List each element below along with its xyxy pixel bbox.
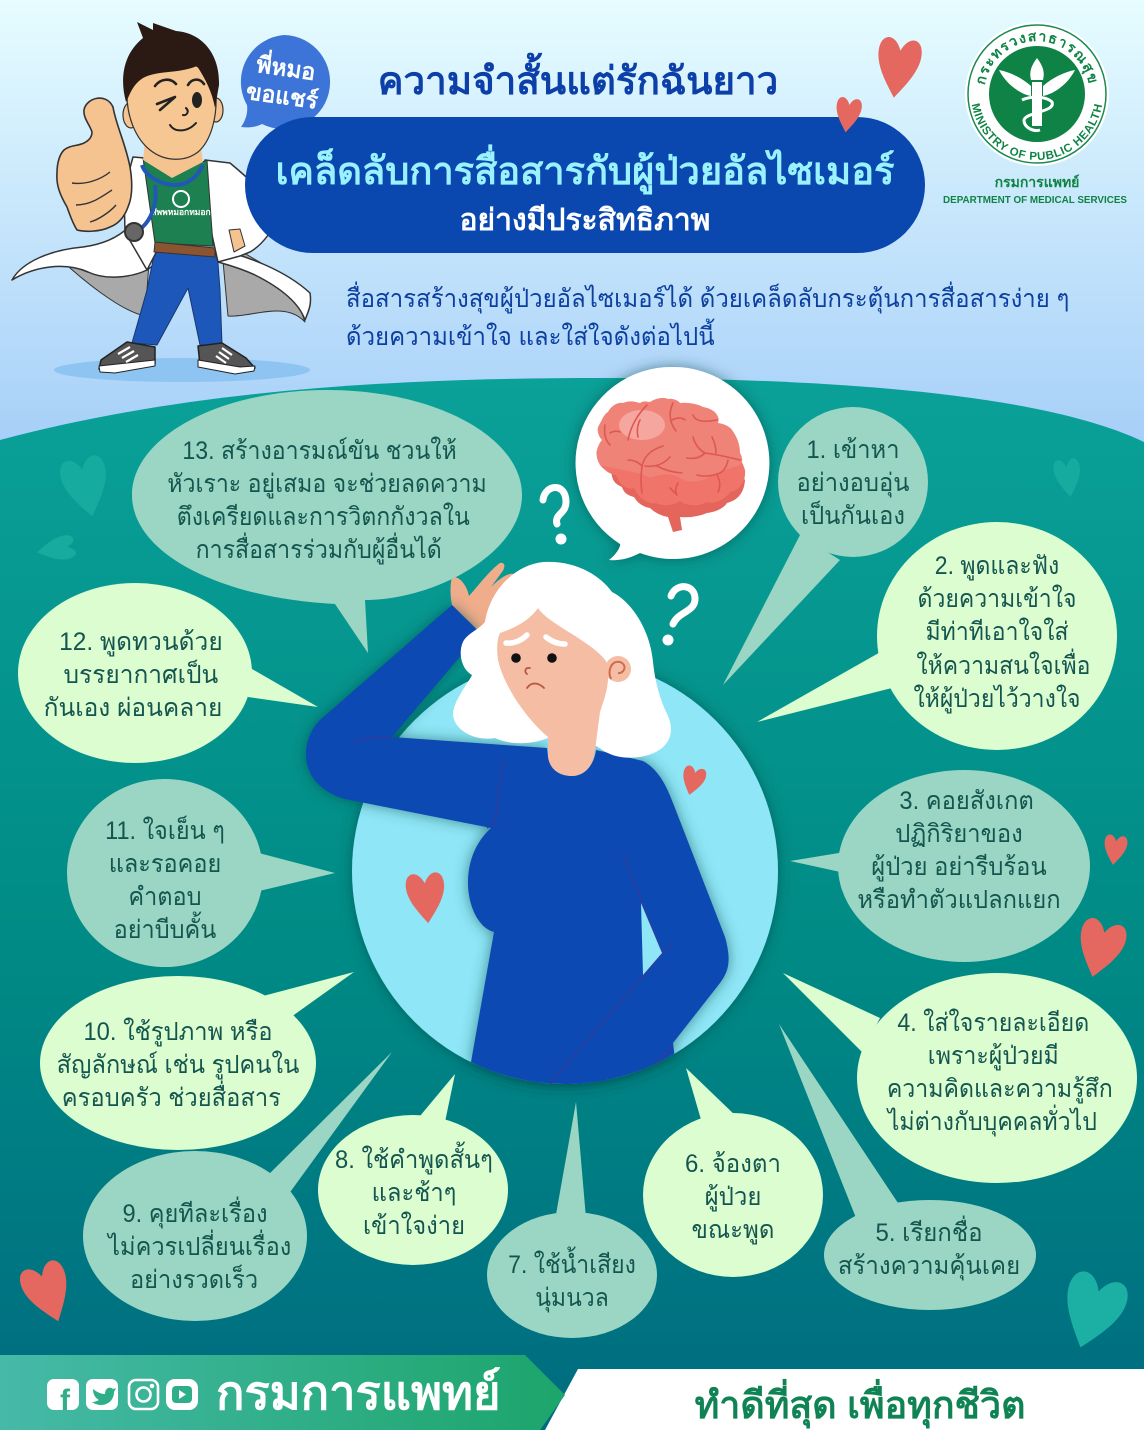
sub title: อย่างมีประสิทธิภาพ — [460, 204, 710, 237]
text: 9. คุยทีละเรื่อง — [122, 1196, 268, 1229]
shirt logo — [173, 191, 189, 207]
text: ให้ผู้ป่วยไว้วางใจ — [913, 684, 1081, 714]
text: อย่าบีบคั้น — [114, 911, 216, 944]
text: 13. สร้างอารมณ์ขัน ชวนให้ — [182, 436, 457, 465]
text: 4. ใส่ใจรายละเอียด — [897, 1008, 1089, 1037]
ground shadow — [54, 358, 310, 382]
bubble 3 — [790, 770, 1090, 962]
logo caption english: DEPARTMENT OF MEDICAL SERVICES — [943, 194, 1127, 206]
text: ปฏิกิริยาของ — [895, 820, 1023, 848]
stethoscope head — [125, 223, 143, 241]
ears — [123, 98, 223, 128]
heart: teal upper left — [58, 453, 115, 521]
footer white band — [545, 1369, 1144, 1430]
intro text: สื่อสารสร้างสุขผู้ป่วยอัลไซเมอร์ได้ ด้วยเคล็ดลับกระตุ้นการสื่อสารง่าย ๆ — [346, 280, 1069, 314]
text: ด้วยความเข้าใจ — [918, 584, 1076, 613]
text: กันเอง ผ่อนคลาย — [44, 695, 222, 722]
tail and bubble shape — [783, 973, 880, 1052]
hand on hip — [229, 229, 245, 252]
text: ไม่ควรเปลี่ยนเรื่อง — [106, 1229, 291, 1261]
logo caption thai: กรมการแพทย์ — [995, 174, 1079, 190]
text: ผู้ป่วย อย่ารีบร้อน — [871, 853, 1047, 882]
icon: twitter — [86, 1379, 118, 1410]
tail and bubble shape — [555, 1102, 586, 1220]
bubble 8 — [318, 1074, 508, 1265]
bubble 7 — [487, 1102, 657, 1338]
text: อย่างรวดเร็ว — [130, 1263, 258, 1294]
text: สร้างความคุ้นเคย — [838, 1253, 1020, 1281]
coat torso — [124, 157, 280, 270]
woman: ear — [605, 656, 631, 682]
text: ให้ความสนใจเพื่อ — [916, 648, 1090, 680]
open eye — [192, 92, 202, 108]
text: บรรยากาศเป็น — [63, 659, 218, 689]
logo: ministry of public health — [943, 22, 1127, 206]
heart: coral header large — [872, 36, 923, 101]
logo emblem — [999, 58, 1075, 131]
central light blue circle — [352, 658, 778, 1084]
text: เข้าใจง่าย — [363, 1211, 465, 1240]
text: อย่างอบอุ่น — [797, 469, 910, 498]
text: ครอบครัว ช่วยสื่อสาร — [62, 1080, 281, 1112]
brain mid lobes — [600, 448, 745, 505]
title band — [245, 117, 925, 253]
tail and bubble shape — [240, 972, 354, 1022]
cape inner grey — [70, 240, 305, 322]
text: สัญลักษณ์ เช่น รูปคนใน — [57, 1050, 300, 1080]
icon: brain — [596, 398, 745, 532]
woman: hand — [450, 563, 522, 640]
doctor mascot — [12, 22, 311, 382]
speech bubble: พี่หมอ ขอแชร์ — [241, 35, 330, 129]
question mark right — [666, 587, 695, 642]
text: 1. เข้าหา — [806, 436, 900, 464]
woman: eyebrows — [506, 635, 565, 644]
text: ความคิดและความรู้สึก — [887, 1075, 1113, 1104]
brain top lobes — [596, 398, 742, 482]
text: 2. พูดและฟัง — [935, 552, 1059, 581]
tail and bubble shape — [757, 650, 892, 722]
woman: body and arms — [306, 605, 729, 1100]
heart: coral lower left — [17, 1258, 80, 1329]
intro text: ด้วยความเข้าใจ และใส่ใจดังต่อไปนี้ — [346, 318, 715, 351]
woman: hair — [453, 562, 671, 758]
legs — [132, 250, 222, 345]
coat left tail — [12, 222, 158, 280]
footer green strip — [0, 1355, 565, 1430]
heart: coral right small — [1102, 834, 1128, 866]
bubble 11 — [67, 779, 335, 967]
bubble 12 — [18, 583, 318, 763]
teal background panel — [0, 378, 1144, 1430]
main title: เคล็ดลับการสื่อสารกับผู้ป่วยอัลไซเมอร์ — [276, 144, 895, 195]
tail and bubble shape — [779, 1024, 900, 1228]
tail and bubble shape — [132, 390, 522, 653]
question mark left — [543, 488, 566, 541]
text: ไม่ต่างกับบุคคลทั่วไป — [886, 1104, 1097, 1137]
stethoscope — [135, 165, 203, 232]
text: หัวเราะ อยู่เสมอ จะช่วยลดความ — [167, 470, 487, 499]
logo thai ring text: กระทรวงสาธารณสุข — [978, 32, 1097, 84]
title: small headline: ความจำสั้นแต่รักฉันยาว — [378, 52, 778, 103]
tail and bubble shape — [723, 535, 840, 685]
logo ring — [965, 22, 1109, 166]
heart: coral header small — [833, 96, 863, 134]
text: หรือทำตัวแปลกแยก — [857, 886, 1061, 914]
text: 6. จ้องตา — [685, 1151, 781, 1178]
shoes — [99, 342, 255, 374]
bubble 10 — [40, 972, 354, 1150]
icon: facebook: f — [60, 1384, 71, 1417]
text: 11. ใจเย็น ๆ — [105, 814, 225, 845]
text: ผู้ป่วย — [705, 1184, 761, 1212]
tail and bubble shape — [255, 1052, 392, 1195]
text: คำตอบ — [128, 883, 202, 911]
bubble 2 — [757, 522, 1117, 750]
tail and bubble shape — [255, 852, 335, 892]
woman: arm crease lines — [353, 737, 672, 1083]
shirt — [143, 158, 213, 246]
tail and bubble shape — [790, 852, 845, 873]
logo english ring text: MINISTRY OF PUBLIC HEALTH — [972, 103, 1102, 160]
icon: facebook — [47, 1379, 79, 1417]
woman: gap between arm and body — [641, 903, 662, 975]
bubble 9 — [83, 1052, 392, 1321]
neck — [143, 140, 203, 178]
tail and bubble shape — [245, 665, 318, 707]
thought bubble shape — [576, 367, 769, 560]
bubble text: ขอแชร์ — [244, 78, 320, 114]
heart: teal lower right — [1052, 1268, 1132, 1357]
bubble 13 — [132, 390, 522, 653]
bubble 5 — [779, 1024, 1036, 1310]
coat right tail — [218, 250, 311, 320]
brain thought bubble — [576, 367, 769, 560]
bubble 6 — [643, 1068, 823, 1277]
wink and eyebrows — [155, 80, 204, 110]
heart: teal small left — [35, 534, 77, 564]
text: 12. พูดทวนด้วย — [59, 629, 223, 657]
bubble 4 — [783, 973, 1137, 1183]
heart: coral in circle right — [678, 764, 708, 798]
text: 8. ใช้คำพูดสั้นๆ — [335, 1141, 493, 1175]
shirt text: สัพพหมอกทมอก — [151, 207, 211, 217]
brain veins — [605, 403, 740, 495]
belt — [154, 242, 215, 257]
thumbs up hand — [57, 98, 132, 231]
text: ตึงเครียดและการวิตกกังวลใน — [177, 502, 470, 531]
text: และช้าๆ — [372, 1179, 456, 1207]
footer slogan: ทำดีที่สุด เพื่อทุกชีวิต — [695, 1379, 1025, 1429]
woman illustration — [306, 562, 729, 1100]
smile and nose — [170, 108, 196, 130]
icon: instagram — [129, 1380, 158, 1409]
text: 3. คอยสังเกต — [899, 787, 1034, 815]
woman: nose and mouth — [525, 668, 544, 688]
heart: coral in circle left — [405, 872, 447, 925]
bubble shape — [241, 35, 330, 129]
text: เป็นกันเอง — [801, 499, 905, 530]
bubble 1 — [723, 407, 928, 685]
text: การสื่อสารร่วมกับผู้อื่นได้ — [196, 532, 442, 565]
text: 5. เรียกชื่อ — [875, 1214, 983, 1247]
hair — [123, 22, 219, 108]
text: ขณะพูด — [692, 1217, 774, 1245]
text: เพราะผู้ป่วยมี — [928, 1042, 1059, 1071]
tail and bubble shape — [415, 1074, 455, 1122]
tail and bubble shape — [686, 1068, 738, 1130]
icon: youtube — [166, 1379, 198, 1410]
footer department name: กรมการแพทย์ — [216, 1366, 501, 1419]
face — [127, 62, 216, 159]
text: 10. ใช้รูปภาพ หรือ — [83, 1017, 273, 1047]
text: มีท่าทีเอาใจใส่ — [926, 617, 1069, 646]
text: และรอคอย — [109, 850, 221, 878]
heart: coral right large — [1071, 916, 1129, 983]
heart: teal upper right — [1052, 458, 1084, 499]
woman: eyes — [511, 653, 557, 663]
bubble text: พี่หมอ — [255, 47, 318, 85]
finger creases — [72, 172, 116, 222]
brain silhouette lower dark — [611, 450, 745, 532]
text: 7. ใช้น้ำเสียง — [508, 1246, 636, 1279]
band shape — [245, 117, 925, 253]
logo inner disc — [989, 46, 1085, 142]
woman: neck and face — [497, 608, 608, 776]
text: นุ่มนวล — [535, 1284, 609, 1313]
brain highlight — [619, 410, 665, 440]
